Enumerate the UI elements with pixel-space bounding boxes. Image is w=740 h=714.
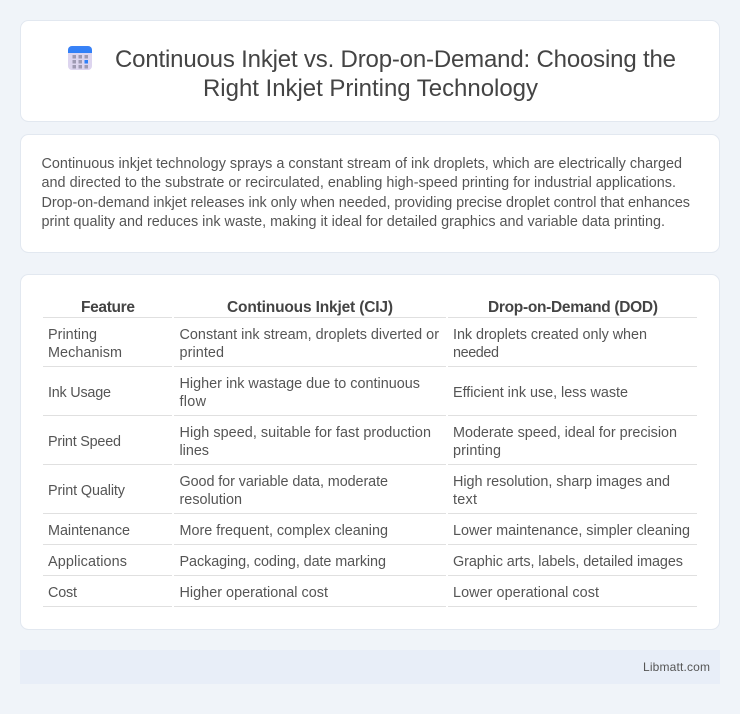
row: printing mechanism: printed xyxy=(180,345,224,361)
table header row: Feature xyxy=(81,299,135,316)
title: Continuous Inkjet vs. Drop-on-Demand: Choosing the xyxy=(115,46,676,73)
text block: introduction paragraph: Continuous inkjet technology sprays a constant stream of ink droplets, which are electrically charged xyxy=(42,156,682,172)
row: printing mechanism: Constant ink stream, droplets diverted or xyxy=(180,327,439,343)
row: cost: Higher operational cost xyxy=(180,585,328,601)
row: ink usage: Higher ink wastage due to continuous xyxy=(180,376,420,392)
text block: introduction paragraph xyxy=(42,156,690,230)
row: applications: Applications xyxy=(48,554,127,570)
row: print quality xyxy=(43,474,697,514)
row: maintenance: Lower maintenance, simpler cleaning xyxy=(453,523,690,539)
row: applications: Packaging, coding, date marking xyxy=(180,554,386,570)
row: ink usage: flow xyxy=(180,394,207,410)
icon: calendar grid xyxy=(68,46,92,70)
row: print quality: Print Quality xyxy=(48,483,126,499)
table header row: Continuous Inkjet (CIJ) xyxy=(227,299,393,316)
row: ink usage: Efficient ink use, less waste xyxy=(453,385,628,401)
text block: introduction paragraph: and directed to the substrate or recirculated, enabling high-speed printing for industrial applications. xyxy=(42,175,676,191)
row: printing mechanism xyxy=(43,327,697,367)
footer xyxy=(20,650,720,684)
table header row xyxy=(43,299,697,318)
row: maintenance xyxy=(43,523,697,545)
row: maintenance: More frequent, complex cleaning xyxy=(180,523,388,539)
title: Right Inkjet Printing Technology xyxy=(203,75,538,102)
panel: introduction xyxy=(20,134,720,252)
row: print speed: lines xyxy=(180,443,209,459)
row: print speed: Moderate speed, ideal for precision xyxy=(453,425,677,441)
row: print quality: Good for variable data, moderate xyxy=(180,474,388,490)
row: cost xyxy=(43,585,697,607)
table header row: Drop-on-Demand (DOD) xyxy=(488,299,658,316)
title xyxy=(115,46,676,102)
row: print speed: High speed, suitable for fast production xyxy=(180,425,431,441)
row: printing mechanism: Mechanism xyxy=(48,345,122,361)
row: maintenance: Maintenance xyxy=(48,523,130,539)
row: printing mechanism: Printing xyxy=(48,327,97,343)
row: cost: Lower operational cost xyxy=(453,585,599,601)
row: print speed: Print Speed xyxy=(48,434,121,450)
row: applications xyxy=(43,554,697,576)
row: ink usage xyxy=(43,376,697,416)
panel: comparison table xyxy=(20,274,720,630)
row: applications: Graphic arts, labels, detailed images xyxy=(453,554,683,570)
footer: Libmatt.com xyxy=(643,660,710,674)
row: print speed xyxy=(43,425,697,465)
row: cost: Cost xyxy=(48,585,77,601)
text block: introduction paragraph: print quality and reduces ink waste, making it ideal for detailed graphics and variable data printing. xyxy=(42,214,665,230)
panel: title card xyxy=(20,20,720,122)
row: print quality: resolution xyxy=(180,492,242,508)
row: print quality: High resolution, sharp images and xyxy=(453,474,670,490)
row: printing mechanism: needed xyxy=(453,345,499,361)
row: ink usage: Ink Usage xyxy=(48,385,111,401)
text block: introduction paragraph: Drop-on-demand inkjet releases ink only when needed, providing precise droplet control that enhances xyxy=(42,195,690,211)
row: print speed: printing xyxy=(453,443,501,459)
row: printing mechanism: Ink droplets created only when xyxy=(453,327,647,343)
row: print quality: text xyxy=(453,492,477,508)
